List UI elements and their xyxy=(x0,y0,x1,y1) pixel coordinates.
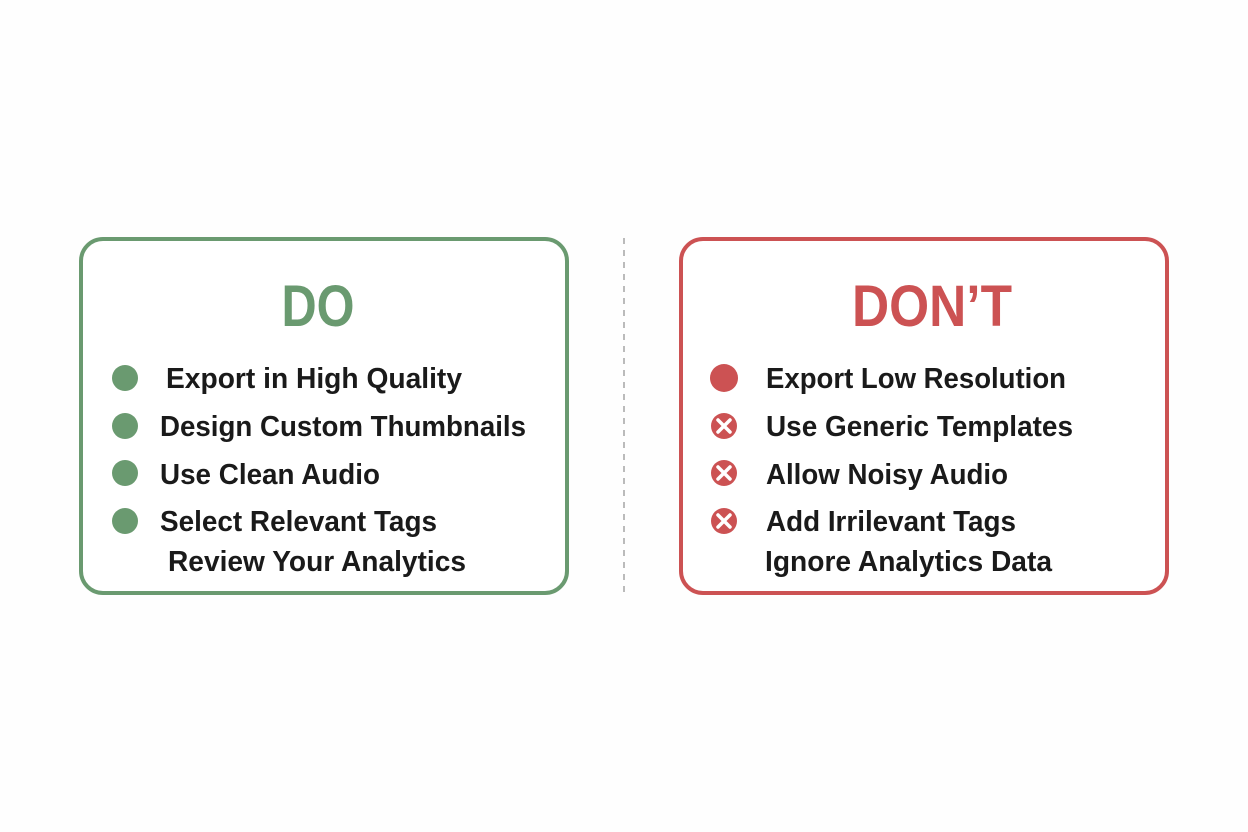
list: do items: Export in High Quality xyxy=(166,363,462,395)
list: dont items: Add Irrilevant Tags xyxy=(766,506,1016,538)
heading: DON'T: DON’T xyxy=(852,274,1012,339)
list: do items: Use Clean Audio xyxy=(160,459,380,491)
list: do items: Review Your Analytics xyxy=(168,546,466,578)
list: do items: Design Custom Thumbnails xyxy=(160,411,526,443)
panel: dont xyxy=(681,239,1167,593)
list: dont items: Use Generic Templates xyxy=(766,411,1073,443)
list: do items xyxy=(112,363,526,578)
list: dont items: Allow Noisy Audio xyxy=(766,459,1008,491)
list: dont items xyxy=(710,363,1073,578)
list: dont items: Export Low Resolution xyxy=(766,363,1066,395)
list: do items: Select Relevant Tags xyxy=(160,506,437,538)
heading: DO: DO xyxy=(282,274,354,339)
panel: do xyxy=(81,239,567,593)
list: dont items: Ignore Analytics Data xyxy=(765,546,1053,578)
